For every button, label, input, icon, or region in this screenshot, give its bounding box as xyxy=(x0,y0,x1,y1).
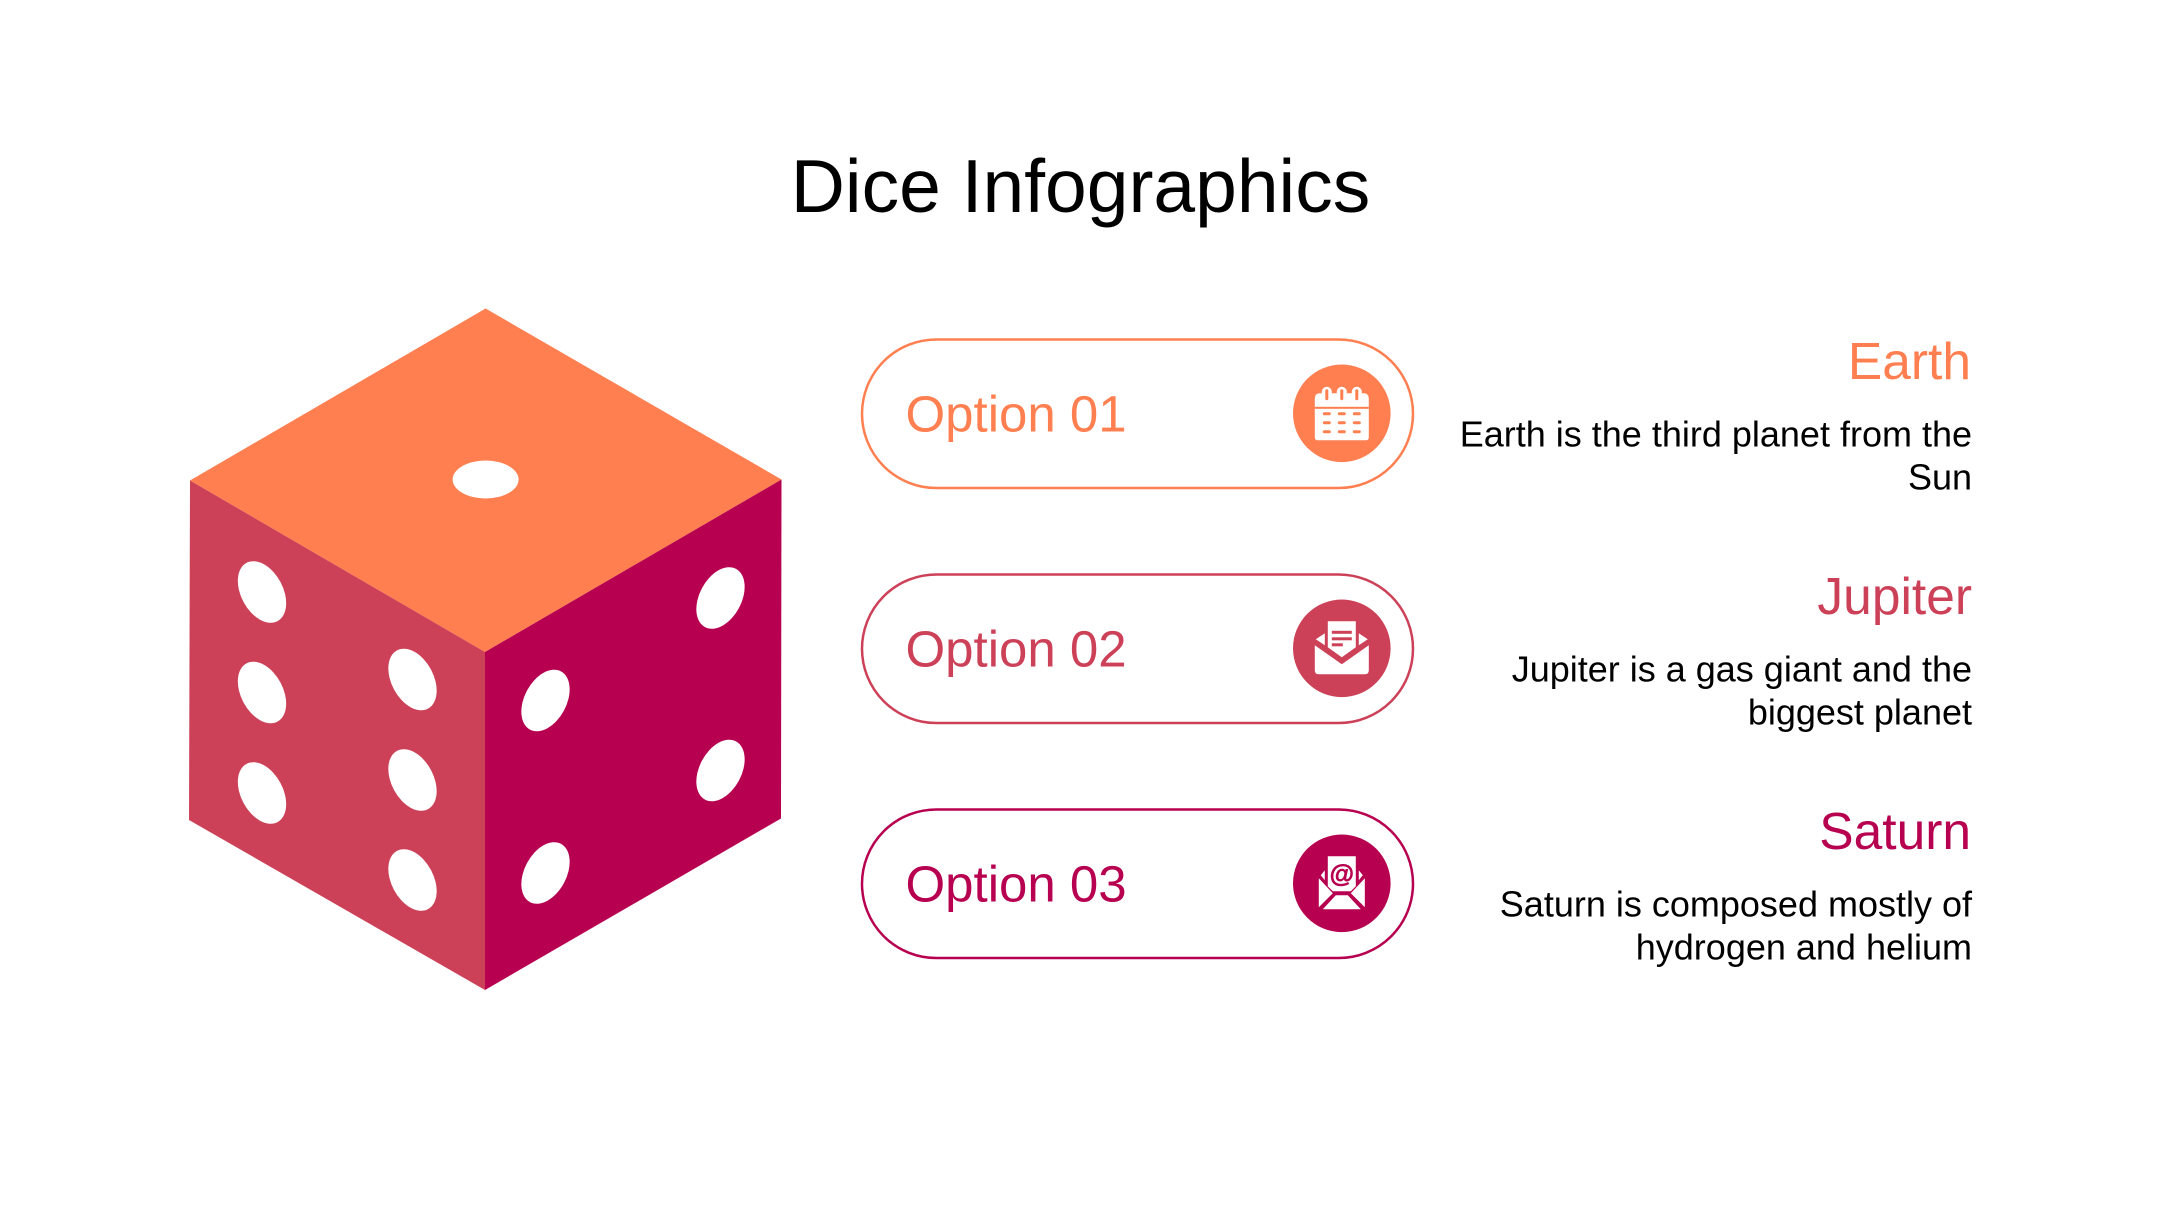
icon: calendar xyxy=(1293,364,1391,462)
dice face: left xyxy=(189,480,485,990)
option 03 label: Option 03 xyxy=(906,856,1127,912)
left face pips xyxy=(228,553,447,919)
text block: Jupiter: Jupiter xyxy=(1817,567,1972,625)
text block: Saturn: Saturn xyxy=(1819,802,1971,860)
icon: envelope with at sign: @ xyxy=(1330,860,1354,888)
icon: envelope with at sign xyxy=(1293,834,1391,932)
dice face: right xyxy=(485,480,782,990)
text block: Saturn: hydrogen and helium xyxy=(1636,926,1972,968)
dice face: top xyxy=(190,308,782,652)
title: Dice Infographics xyxy=(791,144,1370,228)
option 01 label: Option 01 xyxy=(906,386,1127,442)
text block: Jupiter: Jupiter is a gas giant and the xyxy=(1512,648,1972,690)
text block: Saturn xyxy=(1500,802,1973,968)
text block: Earth xyxy=(1460,332,1972,498)
icon: open envelope with letter xyxy=(1293,600,1391,697)
option 02 pill xyxy=(862,574,1413,723)
text block: Saturn: Saturn is composed mostly of xyxy=(1500,884,1973,924)
text block: Jupiter xyxy=(1512,567,1972,732)
text block: Earth: Sun xyxy=(1908,456,1972,498)
top face pip xyxy=(453,460,519,498)
dice illustration xyxy=(189,308,782,990)
option 01 pill xyxy=(862,340,1413,488)
text block: Earth: Earth xyxy=(1848,332,1971,390)
text block: Jupiter: biggest planet xyxy=(1748,692,1972,732)
text block: Earth: Earth is the third planet from the xyxy=(1460,414,1972,454)
option 03 pill xyxy=(862,810,1413,958)
right face pips xyxy=(511,559,755,912)
option 02 label: Option 02 xyxy=(906,620,1127,678)
